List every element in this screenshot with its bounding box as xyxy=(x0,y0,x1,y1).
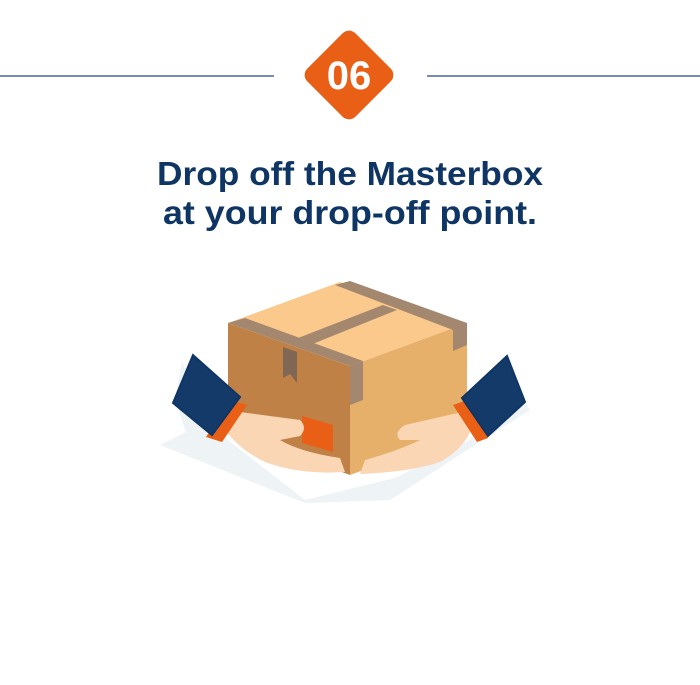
title: at your drop-off point. xyxy=(163,194,537,231)
tape xyxy=(228,318,363,366)
step badge xyxy=(301,27,397,123)
header rule right xyxy=(427,75,700,77)
title: Drop off the Masterbox xyxy=(157,155,544,192)
illustration: hands holding box xyxy=(160,281,530,503)
left cuff xyxy=(206,400,247,442)
left sleeve xyxy=(173,355,240,435)
left hand xyxy=(225,410,345,473)
shadow xyxy=(160,362,530,503)
step badge: 06 xyxy=(327,54,371,98)
label flap xyxy=(283,347,297,383)
box right face xyxy=(350,323,467,475)
right hand xyxy=(360,412,470,474)
box top face xyxy=(228,282,467,366)
right sleeve xyxy=(462,356,525,436)
orange label xyxy=(302,416,333,452)
header rule left xyxy=(0,75,274,77)
right cuff xyxy=(453,400,488,442)
title xyxy=(157,155,544,231)
box left face xyxy=(228,323,350,475)
